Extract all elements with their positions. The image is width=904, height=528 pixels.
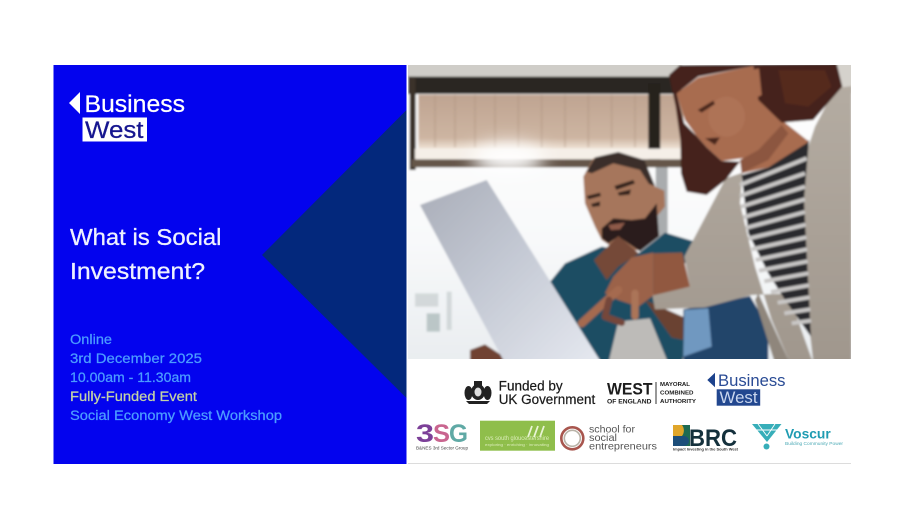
light flare <box>472 143 545 173</box>
window blind <box>418 95 649 149</box>
jeans <box>683 296 768 363</box>
logo: Funded by UK Government: Funded by <box>499 378 563 394</box>
logo: School for Social Entrepreneurs: entrepreneurs <box>589 440 657 452</box>
logo: 3SG: S <box>433 420 450 448</box>
logo: 3SG: B&NES 3rd Sector Group <box>416 446 468 450</box>
logo: Business West (white) <box>69 91 185 144</box>
logo: CVS South Gloucestershire: exploring · enriching · innovating <box>485 443 549 447</box>
logo: BRC: Impact Investing in the South West <box>673 448 739 452</box>
woman cardigan <box>652 86 852 363</box>
logo: West of England Mayoral Combined Authority: WEST <box>607 380 653 398</box>
woman eye and lips <box>698 101 720 145</box>
woman hair <box>669 63 842 195</box>
logo: CVS South Gloucestershire: cvs south gloucestershire <box>485 435 549 442</box>
man hand <box>594 236 639 280</box>
logo: West of England Mayoral Combined Authority: COMBINED <box>660 390 694 396</box>
logo: West of England Mayoral Combined Authority: MAYORAL <box>660 382 690 388</box>
logo: Voscur <box>752 424 844 450</box>
logo: 3SG: G <box>449 420 468 448</box>
event details <box>70 332 282 423</box>
woman hand and fingers <box>582 253 653 323</box>
event details: Online <box>70 332 112 347</box>
event details: Fully-Funded Event <box>70 389 197 404</box>
logo: Business West (navy): West <box>720 389 758 407</box>
window frame <box>408 77 681 94</box>
logo: Business West (navy): Business <box>718 372 786 390</box>
window reflection <box>415 292 452 332</box>
cheek highlight <box>708 97 745 137</box>
logo: School for Social Entrepreneurs: school for <box>589 424 635 436</box>
logo: Business West (navy) <box>707 372 786 407</box>
title: Investment? <box>70 258 205 284</box>
title <box>70 224 222 284</box>
logo: School for Social Entrepreneurs <box>561 424 657 452</box>
logo: Voscur: Voscur <box>785 425 831 441</box>
logo: West of England Mayoral Combined Authority <box>607 380 696 406</box>
event details: Social Economy West Workshop <box>70 408 282 423</box>
window mullions <box>648 83 660 167</box>
dark blue triangle <box>262 110 406 398</box>
woman cardigan shading <box>755 293 790 363</box>
paper <box>420 180 602 363</box>
logo: CVS South Gloucestershire <box>480 421 555 451</box>
event details: 3rd December 2025 <box>70 351 202 366</box>
ceiling <box>408 65 682 78</box>
man brows and eyes <box>587 180 635 207</box>
woman earring and ear <box>752 68 762 98</box>
logo word: Business: Business <box>84 91 185 118</box>
logo: 3SG: 3 <box>416 420 434 448</box>
logo: Funded by UK Government <box>499 378 595 407</box>
photo: two colleagues reviewing a document <box>405 60 855 363</box>
woman forearm <box>653 253 690 295</box>
man head <box>583 153 665 251</box>
man hair <box>587 152 655 186</box>
woman hair highlight <box>778 70 832 107</box>
neck shadow <box>740 125 788 173</box>
man beard <box>602 203 659 251</box>
logo: royal crest <box>464 381 492 404</box>
logo: Voscur: Building Community Power <box>785 441 844 446</box>
logo: School for Social Entrepreneurs: social <box>589 432 617 444</box>
hand holding paper <box>468 343 504 359</box>
photo bottom strip and logos <box>408 372 851 464</box>
logo: West of England Mayoral Combined Authority: OF ENGLAND <box>607 400 652 406</box>
event details: 10.00am - 11.30am <box>70 370 191 385</box>
woman neck and face <box>677 66 809 173</box>
logo: BRC: BRC <box>689 425 737 452</box>
title: What is Social <box>70 224 222 250</box>
logo arrow <box>69 92 80 114</box>
logo: 3SG <box>416 420 468 450</box>
man forearm <box>645 300 687 341</box>
man shirt <box>548 233 695 363</box>
logo box: West: West <box>85 117 144 144</box>
man t-shirt <box>608 318 668 363</box>
logo: West of England Mayoral Combined Authority: AUTHORITY <box>660 399 696 405</box>
woman striped top <box>740 140 811 337</box>
event banner <box>54 65 851 464</box>
panel: blue title panel <box>54 65 406 464</box>
logo: Funded by UK Government: UK Government <box>499 392 595 407</box>
